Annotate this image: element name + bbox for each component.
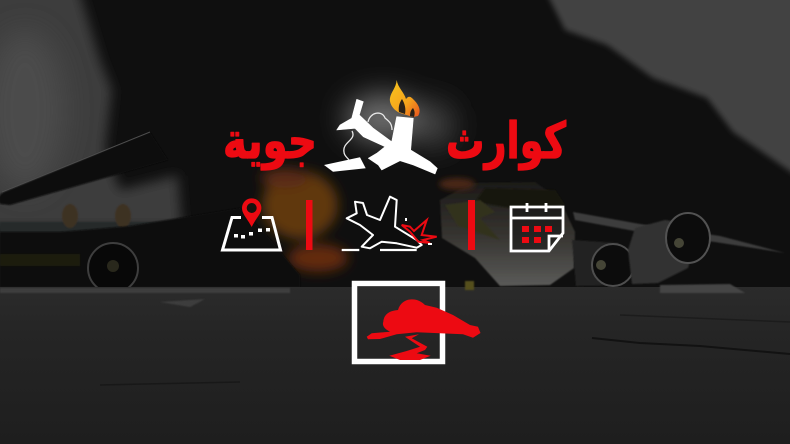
background: wing on the left: [0, 132, 168, 205]
impact burst: [402, 220, 437, 243]
box: bottom icon frame: [354, 284, 480, 362]
icon: map with location pin: [222, 198, 280, 250]
title: [223, 112, 567, 171]
calendar dates: [522, 226, 552, 243]
background: runway cracks: [100, 315, 790, 385]
location pin: [242, 198, 261, 227]
background: fuselage on the right: [440, 182, 575, 286]
background: runway debris: [0, 281, 745, 307]
background: right wing: [573, 212, 785, 253]
icon: red blood pool: [367, 299, 480, 360]
title word right: كوارث: [446, 112, 567, 171]
background: bright left haze: [0, 30, 65, 190]
background: right sky: [545, 0, 790, 178]
icon: calendar: [511, 203, 563, 251]
background: left smoke haze: [0, 0, 182, 228]
background: wreck left: [0, 208, 300, 287]
dotted route: [234, 228, 270, 238]
background: runway: [0, 287, 790, 444]
background: horizon: [0, 222, 180, 232]
background: figures: [62, 204, 131, 228]
impact sparks: [405, 218, 432, 245]
background: engines: [572, 240, 636, 286]
runway lines: [342, 249, 417, 251]
divider right: [468, 200, 475, 250]
background: fire: [261, 168, 348, 272]
broken tail piece: [324, 157, 366, 172]
divider left: [306, 200, 312, 250]
title word left: جوية: [223, 112, 317, 171]
plane body: [337, 99, 437, 174]
flame: [390, 80, 420, 117]
crack lines: [344, 113, 392, 160]
background: lit smoke around the plane icon: [345, 94, 455, 149]
icon: crashed plane with flame: [324, 80, 437, 174]
plane outline: [347, 197, 422, 248]
icon: plane crash: [342, 197, 437, 250]
